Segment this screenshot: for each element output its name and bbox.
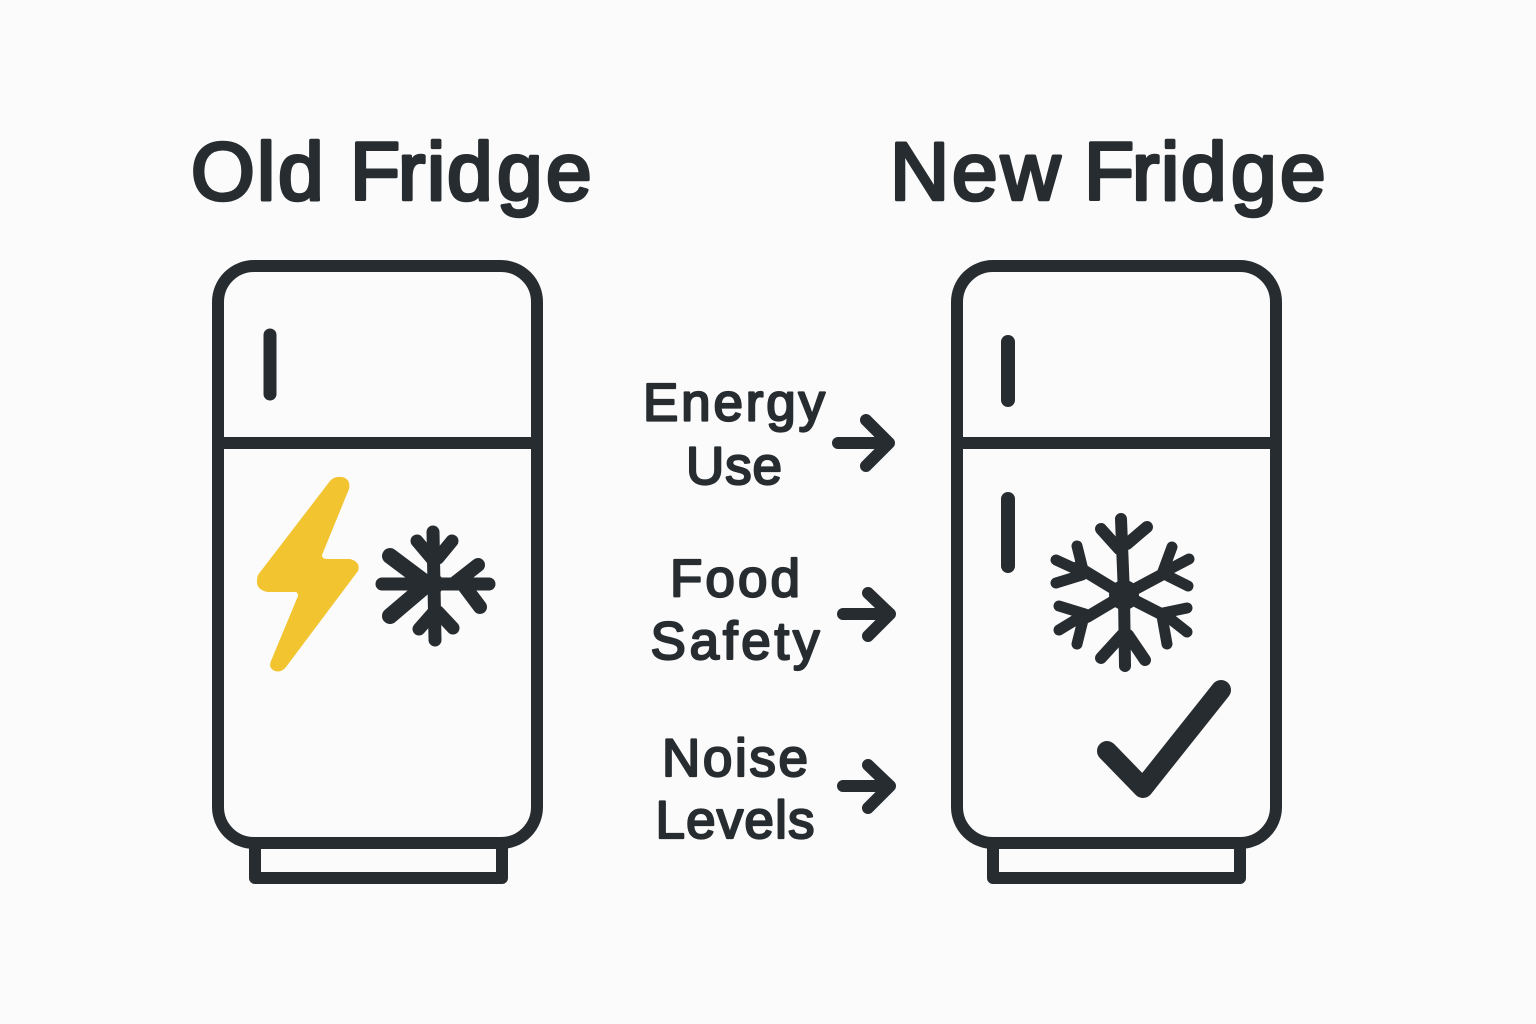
label: Noise Levels	[656, 729, 814, 850]
icon: new fridge snowflake	[1056, 519, 1189, 666]
new fridge outline	[957, 266, 1276, 878]
icon: lightning bolt	[257, 477, 359, 672]
arrow: noise	[843, 765, 890, 808]
label: Noise Levels: Noise	[662, 729, 808, 788]
label: Energy Use	[643, 374, 826, 496]
label: Noise Levels: Levels	[656, 791, 814, 850]
title: New Fridge: New Fridge	[890, 126, 1326, 218]
label: Food Safety: Food	[670, 550, 800, 608]
label: Energy Use: Energy	[643, 374, 826, 432]
arrow: energy	[838, 420, 889, 466]
label: Food Safety	[650, 550, 820, 671]
old fridge outline	[218, 266, 537, 878]
title: Old Fridge: Old Fridge	[191, 126, 592, 218]
icon: check mark	[1107, 690, 1221, 788]
label: Energy Use: Use	[686, 437, 782, 496]
icon: old fridge snowflake	[382, 532, 489, 640]
arrow: food	[843, 593, 890, 636]
label: Food Safety: Safety	[650, 612, 820, 671]
